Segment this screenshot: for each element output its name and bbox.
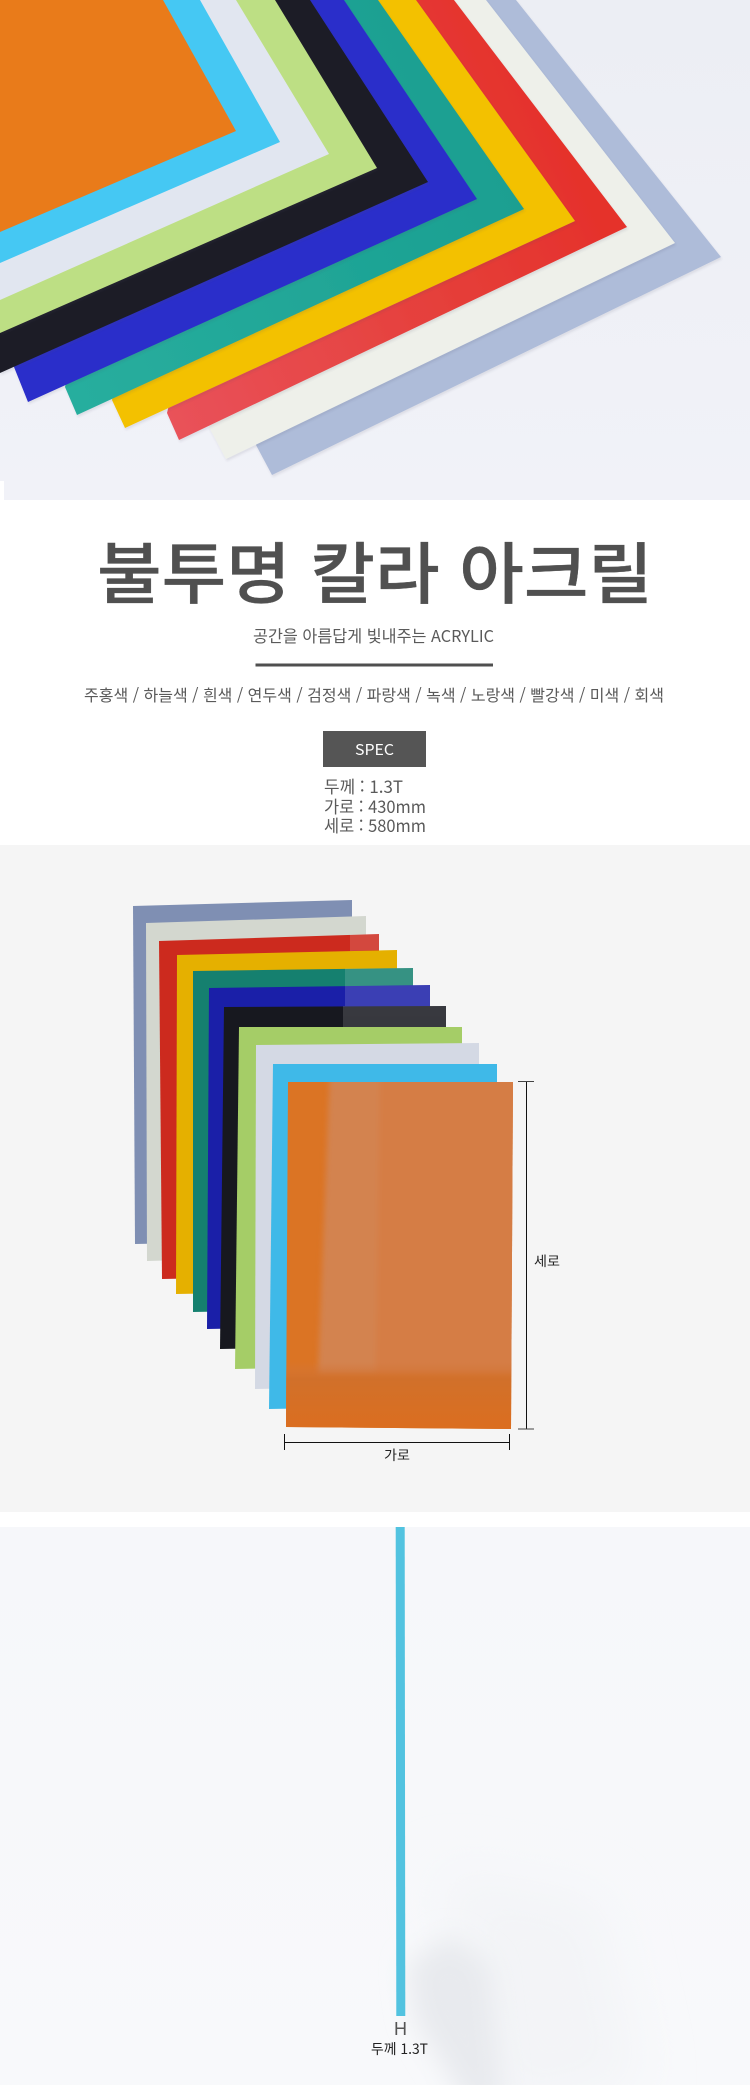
sheet: grey blue	[133, 900, 352, 1244]
spec values: 가로 : 430mm	[324, 793, 426, 818]
spec badge: SPEC	[355, 739, 394, 760]
orange glossy centre	[374, 1082, 513, 1374]
sheet: yellow	[176, 950, 397, 1294]
orange lower band	[286, 1366, 512, 1429]
dimension: height	[518, 1082, 534, 1429]
sheet: cream	[146, 916, 366, 1261]
orange highlight band	[319, 1082, 376, 1366]
dimension label: height: 세로	[534, 1250, 560, 1270]
panel: hero photo of acrylic sheets	[0, 0, 750, 500]
sheet: orange	[286, 1082, 513, 1429]
sheet: green	[0, 0, 377, 333]
sheet: grey blue	[0, 0, 721, 475]
sheet: orange	[0, 0, 236, 232]
thickness label: 두께 1.3T	[371, 2039, 428, 2059]
title: 불투명 칼라 아크릴	[97, 521, 653, 618]
panel: size diagram	[0, 845, 750, 1512]
sheet: cream	[0, 0, 675, 459]
sheet: blue	[0, 0, 477, 402]
glossy highlights on sheet edges	[343, 934, 446, 1027]
dimension: width	[284, 1434, 510, 1450]
spec values: 두께 : 1.3T	[324, 773, 403, 798]
spec values	[324, 773, 426, 837]
sheet: teal	[0, 0, 524, 415]
sheet: yellow	[0, 0, 575, 428]
divider line	[256, 664, 493, 666]
subtitle: 공간을 아름답게 빛내주는 ACRYLIC	[253, 623, 494, 647]
color list: 주홍색 / 하늘색 / 흰색 / 연두색 / 검정색 / 파랑색 / 녹색 / 노랑색 / 빨강색 / 미색 / 회색	[84, 682, 664, 706]
sheet: sky blue	[0, 0, 280, 263]
sheet: black	[220, 1006, 446, 1349]
sheet: red	[0, 0, 627, 440]
spec values: 세로 : 580mm	[324, 812, 426, 837]
sheet: sky blue	[269, 1064, 497, 1409]
sheet: red	[159, 934, 379, 1279]
stick shadow	[410, 1940, 507, 2085]
dimension label: width: 가로	[384, 1444, 410, 1464]
H mark: H	[394, 2019, 407, 2039]
sheet: green	[235, 1027, 462, 1369]
sheet: black	[0, 0, 428, 373]
sheet: blue	[207, 985, 430, 1329]
panel: thickness view	[0, 1527, 750, 2100]
sheet: white	[0, 0, 329, 300]
sheet: white	[255, 1043, 479, 1389]
sheet: teal	[193, 968, 413, 1312]
acrylic edge	[396, 1527, 405, 2016]
spec badge	[323, 731, 426, 767]
